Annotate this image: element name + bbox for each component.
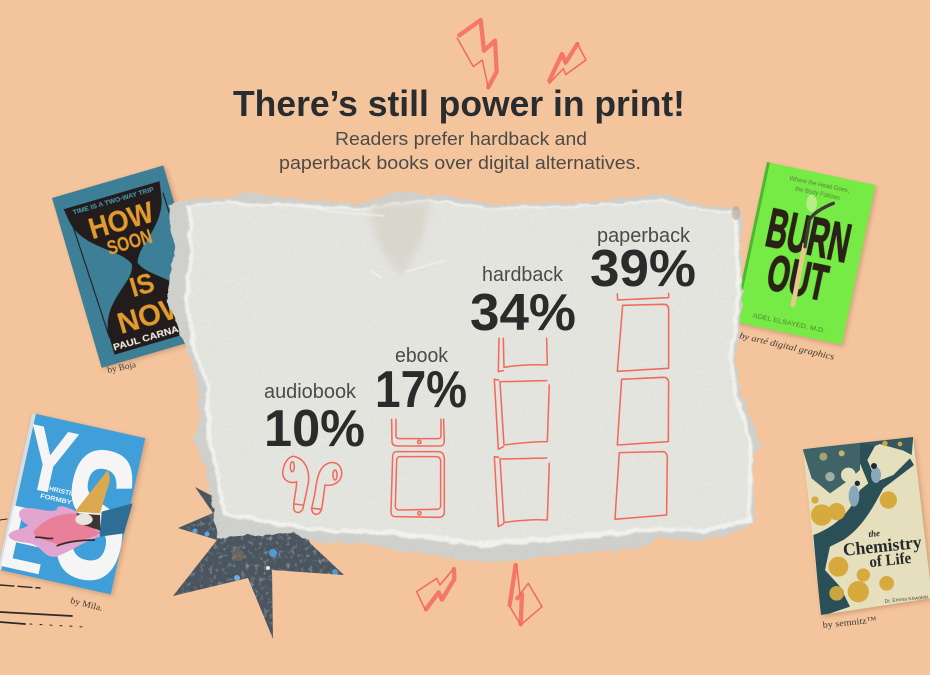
book: Burnout: the Body Follows: [794, 186, 840, 202]
icon: tablet stack: [391, 419, 444, 517]
book: The Chemistry of Life: the: [868, 528, 880, 539]
paper stain crease: [370, 202, 430, 275]
caption: by semnitz: by semnitz™: [822, 614, 877, 630]
book: Yes melting ice cream: S: [38, 407, 153, 624]
book: Yes melting ice cream: CHRISTIE: [43, 484, 77, 498]
torn paper panel: [160, 185, 770, 570]
icon: paperback book stack: [615, 293, 669, 519]
chart column: paperback 39%: 39%: [590, 240, 696, 298]
chart column: ebook 17%: 17%: [375, 361, 467, 419]
chart column: hardback 34%: 34%: [470, 284, 576, 342]
subtitle: paperback books over digital alternatives.: [279, 153, 641, 173]
chart column: audiobook 10%: 10%: [264, 400, 365, 458]
book: How Soon Is Now: HOW: [85, 196, 158, 246]
book: Yes melting ice cream: [0, 413, 148, 598]
title: There’s still power in print!: [233, 83, 685, 124]
book: Burnout: OUT: [762, 244, 833, 312]
book: Burnout: [733, 162, 876, 345]
chart column: hardback 34%: hardback: [482, 264, 564, 286]
icon: hardback book stack: [494, 338, 549, 527]
book: Burnout: ADEL ELSAYED, M.D.: [752, 312, 826, 335]
caption: by Boja: by Boja: [106, 359, 137, 375]
book: The Chemistry of Life: Chemistry: [842, 532, 923, 560]
chart column: ebook 17%: ebook: [395, 345, 449, 367]
lightning bolt top left: [457, 20, 497, 88]
caption: by arte digital graphics: by arté digital graphics: [739, 330, 836, 362]
book: The Chemistry of Life: Dr. Emma Kowalski: [884, 594, 929, 605]
subtitle: [279, 129, 641, 173]
chart column: audiobook 10%: audiobook: [264, 381, 357, 403]
book: How Soon Is Now: IS: [126, 266, 158, 303]
book: The Chemistry of Life: [803, 437, 930, 617]
book: Burnout: Where the Head Goes,: [789, 176, 850, 195]
star shaped collage scrap: [173, 487, 344, 639]
lightning bolt bottom right: [509, 565, 542, 625]
caption: by Mila: by Mila.: [70, 595, 104, 613]
book: How Soon Is Now: SOON: [105, 226, 155, 260]
subtitle: Readers prefer hardback and: [335, 129, 587, 149]
book: Burnout: BURN: [761, 196, 856, 274]
book: Yes melting ice cream: Y: [14, 406, 84, 516]
book: How Soon Is Now: TIME IS A TWO-WAY TRIP: [72, 186, 155, 217]
book: Yes melting ice cream: FORMBY: [39, 493, 73, 507]
chart column: hardback 34%: [470, 264, 576, 527]
chart column: paperback 39%: [590, 225, 696, 519]
icon: earbuds: [283, 456, 342, 514]
chart column: paperback 39%: paperback: [597, 225, 691, 247]
burnt match on Burnout cover: [793, 195, 833, 307]
chart column: audiobook 10%: [264, 381, 365, 514]
lightning bolt top right: [549, 43, 586, 83]
book: How Soon Is Now: NOW: [114, 289, 193, 341]
scribble marks: [0, 519, 85, 627]
book: How Soon Is Now: PAUL CARNAHAN: [112, 318, 202, 354]
book: The Chemistry of Life: of Life: [869, 550, 912, 571]
chart column: ebook 17%: [375, 345, 467, 517]
lightning bolt bottom left: [417, 569, 454, 610]
book: How Soon Is Now: [52, 165, 213, 368]
